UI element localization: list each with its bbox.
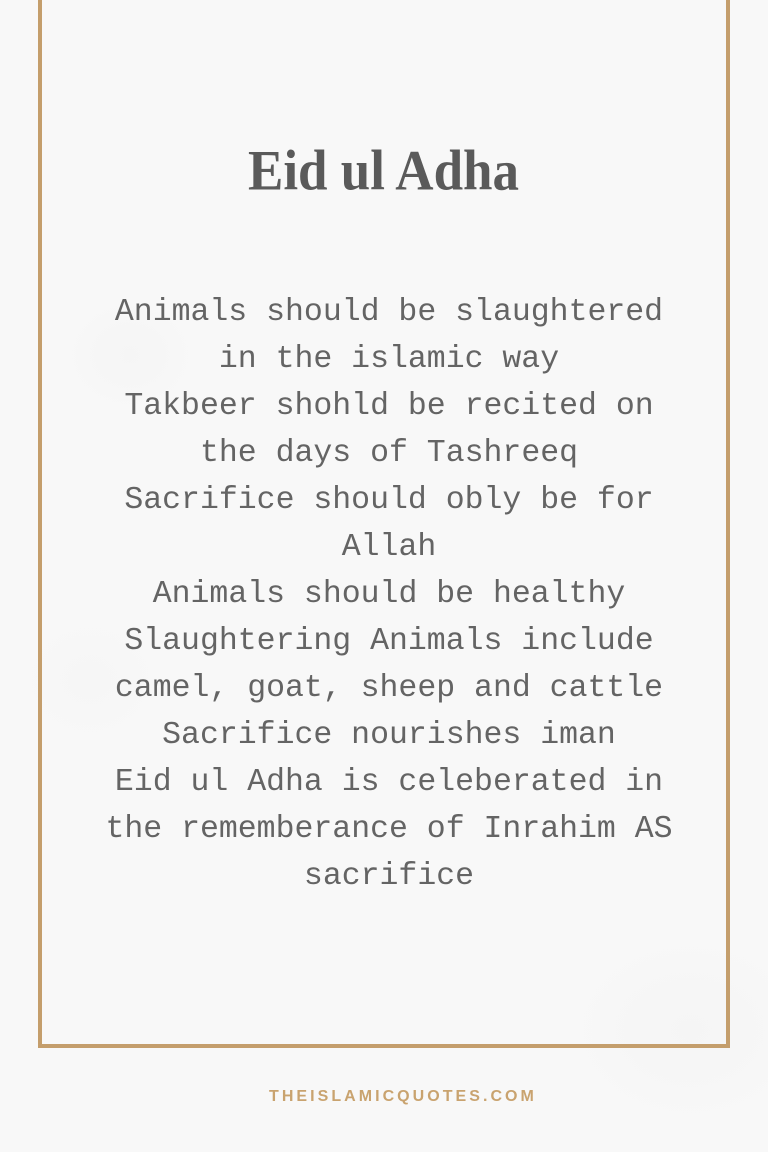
text block: Animals should be healthy (153, 577, 625, 612)
text block: in the islamic way (219, 342, 559, 377)
text block: camel, goat, sheep and cattle (115, 671, 663, 706)
title: Eid ul Adha (248, 140, 519, 202)
text block: Slaughtering Animals include (124, 624, 654, 659)
text block: the rememberance of Inrahim AS (105, 812, 673, 847)
text block: Allah (342, 530, 436, 565)
text block: sacrifice (304, 859, 474, 894)
text block: Sacrifice nourishes iman (162, 718, 616, 753)
footer website: THEISLAMICQUOTES.COM (269, 1088, 537, 1105)
text block: Animals should be slaughtered (115, 295, 663, 330)
text block (105, 295, 673, 894)
text block: Sacrifice should obly be for (124, 483, 654, 518)
text block: Takbeer shohld be recited on (124, 389, 654, 424)
text block: Eid ul Adha is celeberated in (115, 765, 663, 800)
text block: the days of Tashreeq (200, 436, 578, 471)
